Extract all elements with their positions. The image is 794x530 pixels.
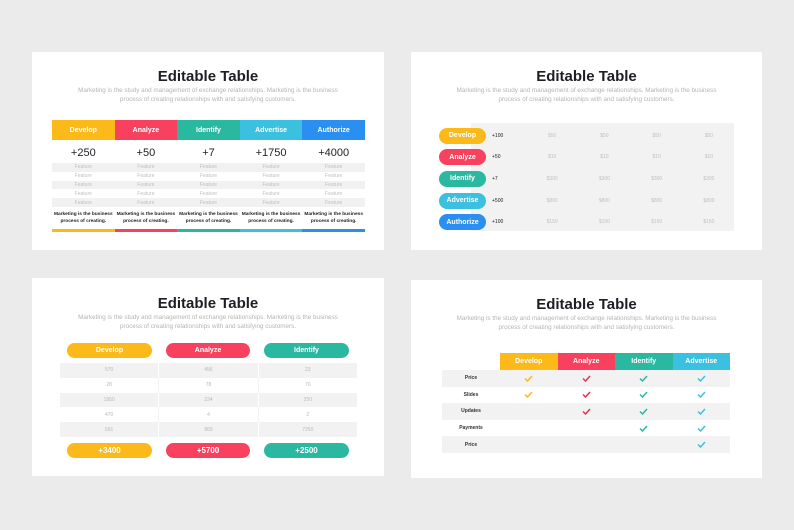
feature rows: Feature [325, 200, 342, 206]
header bar: Advertise [255, 126, 287, 134]
numbers row: +1750 [256, 147, 287, 159]
header pills: Identify [294, 347, 319, 354]
header bar [52, 120, 365, 140]
header bar: Develop [70, 126, 97, 134]
header bar: Identify [196, 126, 221, 134]
total pills: +2500 [295, 446, 318, 455]
rows: $150 [599, 219, 610, 225]
footer descriptions: process of creating. [60, 218, 106, 224]
rows: $800 [651, 198, 662, 204]
footer descriptions: process of creating. [248, 218, 294, 224]
numbers row: +4000 [318, 147, 349, 159]
title: Editable Table [158, 68, 258, 85]
numbers row [71, 147, 349, 159]
data table: 456 [204, 367, 213, 373]
feature rows: Feature [325, 191, 342, 197]
subtitle [457, 87, 716, 102]
check rows: Slides [464, 392, 478, 398]
rows: $300 [703, 176, 714, 182]
header bar: Advertise [685, 358, 717, 365]
feature rows: Feature [137, 164, 154, 170]
feature rows: Feature [75, 173, 92, 179]
rows: $10 [705, 154, 713, 160]
header bar: Analyze [133, 126, 159, 134]
rows: +7 [492, 176, 498, 182]
feature rows: Feature [325, 173, 342, 179]
rows: +500 [492, 198, 503, 204]
rows: Authorize [446, 219, 479, 226]
footer descriptions: Marketing is the business [179, 212, 238, 217]
rows: $300 [599, 176, 610, 182]
footer descriptions: Marketing is the business [242, 212, 300, 217]
feature rows: Feature [75, 200, 92, 206]
rows: $50 [652, 133, 661, 139]
feature rows: Feature [262, 173, 280, 179]
feature rows: Feature [75, 182, 92, 188]
rows: $300 [651, 176, 662, 182]
data table: 234 [204, 397, 213, 403]
header bar: Identify [631, 358, 656, 365]
bottom colour bar [52, 229, 365, 232]
feature rows [52, 163, 365, 207]
subtitle: process of creating relationships with and satisfying customers. [120, 322, 296, 330]
data table: 470 [105, 412, 113, 418]
subtitle: Marketing is the study and management of exchange relationships. Marketing is the business [78, 87, 338, 94]
data table: 2 [306, 412, 309, 418]
data table: 250 [304, 397, 312, 403]
feature rows: Feature [137, 191, 154, 197]
rows: Develop [449, 132, 476, 139]
numbers row: +50 [137, 147, 155, 159]
subtitle [457, 315, 716, 330]
total pills: +3400 [98, 446, 121, 455]
header bar: Analyze [573, 358, 599, 365]
check rows: Price [465, 375, 477, 381]
feature rows: Feature [137, 200, 154, 206]
panel: top-right pill table [411, 52, 762, 250]
check rows [442, 370, 730, 453]
check rows: Updates [461, 408, 481, 414]
feature rows: Feature [200, 200, 217, 206]
rows: $300 [547, 176, 558, 182]
footer descriptions [54, 212, 363, 224]
feature rows: Feature [200, 164, 217, 170]
rows: $800 [599, 198, 610, 204]
rows: $150 [547, 219, 558, 225]
feature rows: Feature [325, 164, 342, 170]
header pills [67, 343, 349, 358]
title: Editable Table [158, 295, 258, 312]
footer descriptions: Marketing is the business [54, 212, 113, 217]
subtitle [78, 314, 338, 330]
check rows: Payments [459, 425, 483, 431]
feature rows: Feature [137, 182, 154, 188]
subtitle: Marketing is the study and management of exchange relationships. Marketing is the business [78, 314, 338, 321]
feature rows: Feature [262, 164, 280, 170]
footer descriptions: process of creating. [311, 218, 356, 224]
rows: $50 [705, 133, 713, 139]
subtitle: Marketing is the study and management of exchange relationships. Marketing is the business [457, 315, 716, 322]
data table: 23 [305, 367, 311, 373]
data table: 7250 [302, 427, 313, 433]
data table: 1950 [104, 397, 115, 403]
header bar: Develop [515, 358, 542, 365]
header bar: Authorize [318, 126, 350, 134]
feature rows: Feature [262, 200, 280, 206]
header bar [500, 353, 730, 370]
header pills: Develop [96, 347, 123, 354]
feature rows: Feature [75, 191, 92, 197]
total pills: +5700 [197, 446, 219, 455]
data table: 570 [105, 367, 113, 373]
feature rows: Feature [137, 173, 154, 179]
panel: top-left table [32, 52, 384, 250]
rows: $10 [652, 154, 661, 160]
rows: $800 [547, 198, 558, 204]
rows: $10 [548, 154, 556, 160]
data table: 869 [204, 427, 213, 433]
rows: +50 [492, 154, 500, 160]
rows: $800 [703, 198, 714, 204]
data table: 28 [106, 382, 112, 388]
feature rows: Feature [200, 191, 217, 197]
data table: 4 [207, 412, 210, 418]
subtitle [78, 87, 338, 102]
feature rows: Feature [325, 182, 342, 188]
numbers row: +250 [71, 147, 96, 159]
rows: $150 [651, 219, 662, 225]
rows: Analyze [449, 154, 476, 161]
panel: bottom-right checklist table [411, 280, 762, 478]
feature rows: Feature [262, 182, 280, 188]
rows: +100 [492, 219, 503, 225]
header pills: Analyze [195, 347, 221, 354]
rows: +100 [492, 133, 503, 139]
title: Editable Table [536, 296, 637, 313]
rows [439, 128, 714, 230]
rows: Advertise [447, 197, 478, 204]
footer descriptions: Marketing is the business [117, 212, 175, 217]
rows: $50 [548, 133, 556, 139]
subtitle: Marketing is the study and management of exchange relationships. Marketing is the business [457, 87, 716, 94]
feature rows: Feature [262, 191, 280, 197]
rows: $50 [600, 133, 609, 139]
title: Editable Table [536, 68, 637, 85]
total pills [67, 443, 349, 458]
data table: 70 [305, 382, 311, 388]
numbers row: +7 [202, 147, 215, 159]
footer descriptions: process of creating. [123, 218, 169, 224]
subtitle: process of creating relationships with and satisfying customers. [120, 96, 296, 102]
footer descriptions: process of creating. [186, 218, 231, 224]
rows: $10 [600, 154, 609, 160]
data table: 78 [206, 382, 211, 388]
rows: $150 [703, 219, 714, 225]
data table [60, 363, 357, 437]
footer descriptions: Marketing is the business [304, 212, 363, 217]
data table: 591 [105, 427, 113, 433]
feature rows: Feature [200, 182, 217, 188]
check rows: Price [465, 442, 477, 448]
subtitle: process of creating relationships with and satisfying customers. [498, 96, 675, 102]
feature rows: Feature [200, 173, 217, 179]
panel: bottom-left three-column table [32, 278, 384, 476]
feature rows: Feature [75, 164, 92, 170]
gray table [471, 123, 734, 231]
rows: Identify [450, 175, 475, 182]
subtitle: process of creating relationships with and satisfying customers. [498, 324, 675, 330]
